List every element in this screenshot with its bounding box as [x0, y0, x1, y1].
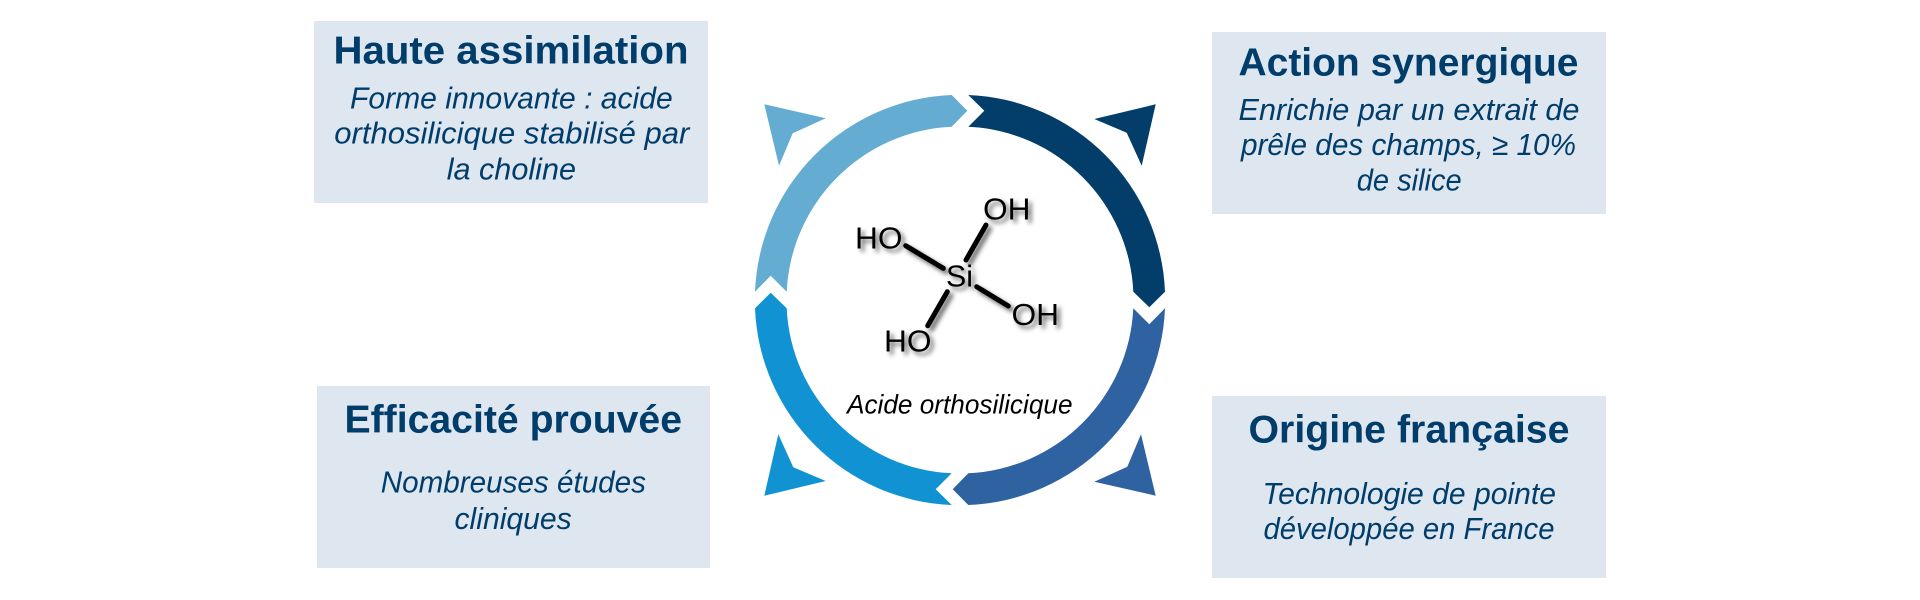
arrow: dark navy ring segment — [968, 95, 1165, 307]
text block: Action synergique description: Enrichie par un extrait de — [1238, 92, 1580, 127]
text block: Origine française description — [1262, 476, 1556, 546]
icon: corner pointer bottom left — [764, 434, 826, 496]
chart: orthosilicic acid molecule: OH — [1012, 297, 1059, 332]
text block: Action synergique description: de silice — [1357, 162, 1462, 197]
panel: Haute assimilation — [314, 21, 708, 203]
text block: Action synergique description: prêle des champs, ≥ 10% — [1240, 127, 1576, 162]
chart: orthosilicic acid molecule — [855, 191, 1059, 359]
text block: Action synergique description — [1238, 92, 1580, 197]
text block: Efficacité prouvée description: cliniques — [454, 501, 572, 536]
text block: Haute assimilation description — [334, 81, 691, 186]
arrow: light blue ring segment — [755, 95, 967, 292]
text block: Origine française description: développée en France — [1264, 511, 1554, 546]
panel: Origine française — [1212, 396, 1606, 578]
icon: corner pointer top left — [764, 104, 826, 166]
icon: corner pointer bottom right — [1094, 434, 1156, 496]
text block: Haute assimilation description: la choline — [447, 151, 576, 186]
caption: Acide orthosilicique: Acide orthosilicique — [845, 389, 1072, 419]
arrow: bright blue ring segment — [755, 293, 952, 505]
heading: Origine française: Origine française — [1248, 409, 1570, 452]
heading: Haute assimilation: Haute assimilation — [334, 30, 688, 72]
text block: Efficacité prouvée description — [381, 465, 646, 536]
chart: orthosilicic acid molecule: OH — [983, 191, 1030, 226]
chart: orthosilicic acid molecule: HO — [855, 220, 902, 255]
chart: orthosilicic acid molecule: Si — [946, 259, 973, 294]
panel: Action synergique — [1212, 32, 1606, 214]
heading: Efficacité prouvée: Efficacité prouvée — [344, 398, 682, 441]
text block: Haute assimilation description: orthosilicique stabilisé par — [334, 116, 691, 151]
heading: Action synergique: Action synergique — [1238, 42, 1578, 85]
panel: Efficacité prouvée — [317, 386, 710, 568]
icon: corner pointer top right — [1094, 104, 1156, 166]
text block: Origine française description: Technologie de pointe — [1262, 476, 1556, 511]
chart: orthosilicic acid molecule: HO — [884, 324, 932, 359]
text block: Haute assimilation description: Forme innovante : acide — [350, 81, 673, 116]
arrow: medium blue ring segment — [953, 308, 1165, 505]
text block: Efficacité prouvée description: Nombreuses études — [381, 465, 646, 500]
